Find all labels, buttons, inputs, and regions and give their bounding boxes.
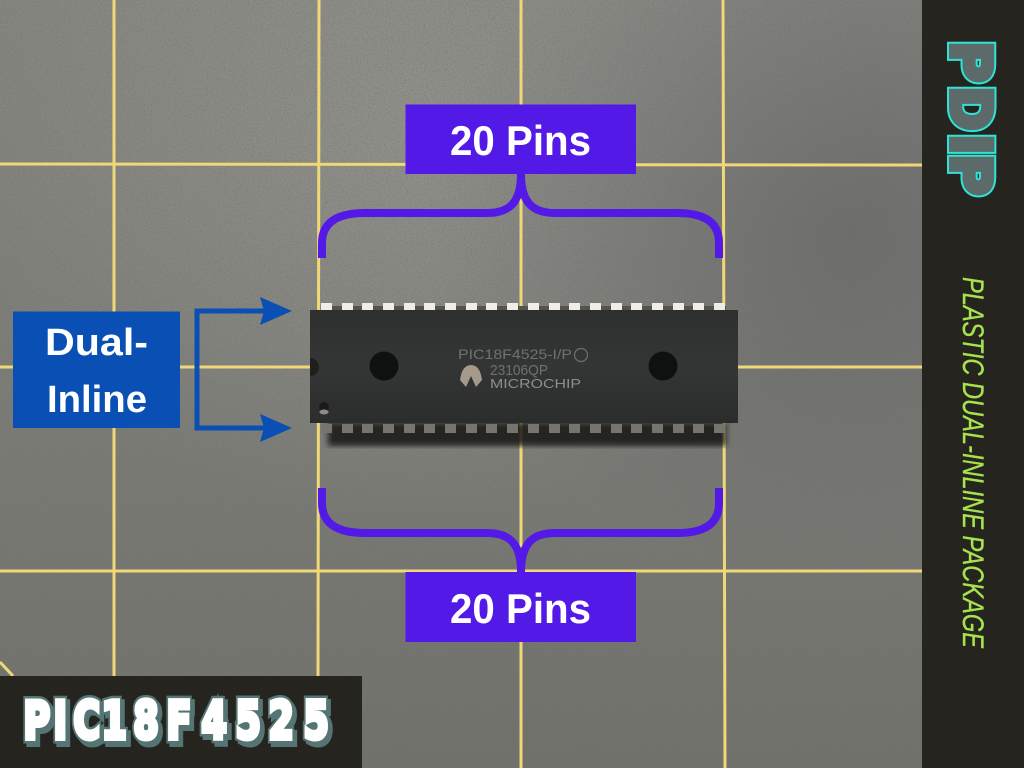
left notch	[310, 358, 319, 376]
title: PDIP: PDIP	[940, 44, 1004, 194]
bottom label: 20 Pins	[406, 572, 636, 642]
top label: 20 Pins	[406, 104, 636, 174]
top bracket	[322, 174, 719, 258]
part number: PIC18F4525: PIC18F4525	[26, 693, 332, 755]
top pins	[321, 303, 725, 311]
label: Dual-Inline: Inline	[47, 379, 147, 421]
chip shadow	[328, 422, 726, 446]
bottom label: 20 Pins: 20 Pins	[450, 585, 591, 632]
part number: PIC18F4525: PIC18F4525	[23, 690, 329, 751]
bottom pins	[321, 424, 725, 433]
pin-one dot	[319, 402, 329, 412]
microcontroller chip	[310, 303, 738, 433]
part marking: PIC18F4525-I/P	[458, 346, 572, 362]
right sidebar	[922, 0, 1024, 768]
microchip logo	[460, 365, 482, 387]
microcontroller chip: MICROCHIP	[490, 376, 581, 391]
label: Dual-Inline	[13, 312, 180, 428]
top pin shadow strip	[321, 306, 726, 311]
title: PDIP: PDIP	[940, 44, 1004, 194]
bottom bracket	[322, 488, 719, 572]
subtitle: Plastic Dual-Inline Package: PLASTIC DUAL-INLINE PACKAGE	[956, 277, 989, 649]
part number plate	[0, 676, 362, 768]
microcontroller chip: 23106QP	[490, 362, 548, 379]
chip body	[310, 310, 738, 423]
label: Dual-Inline: Dual-	[45, 322, 148, 364]
part number: PIC18F4525: PIC18F4525	[23, 690, 329, 751]
mold holes	[370, 352, 398, 380]
top label: 20 Pins: 20 Pins	[450, 117, 591, 164]
arrows to pin rows	[197, 297, 292, 442]
